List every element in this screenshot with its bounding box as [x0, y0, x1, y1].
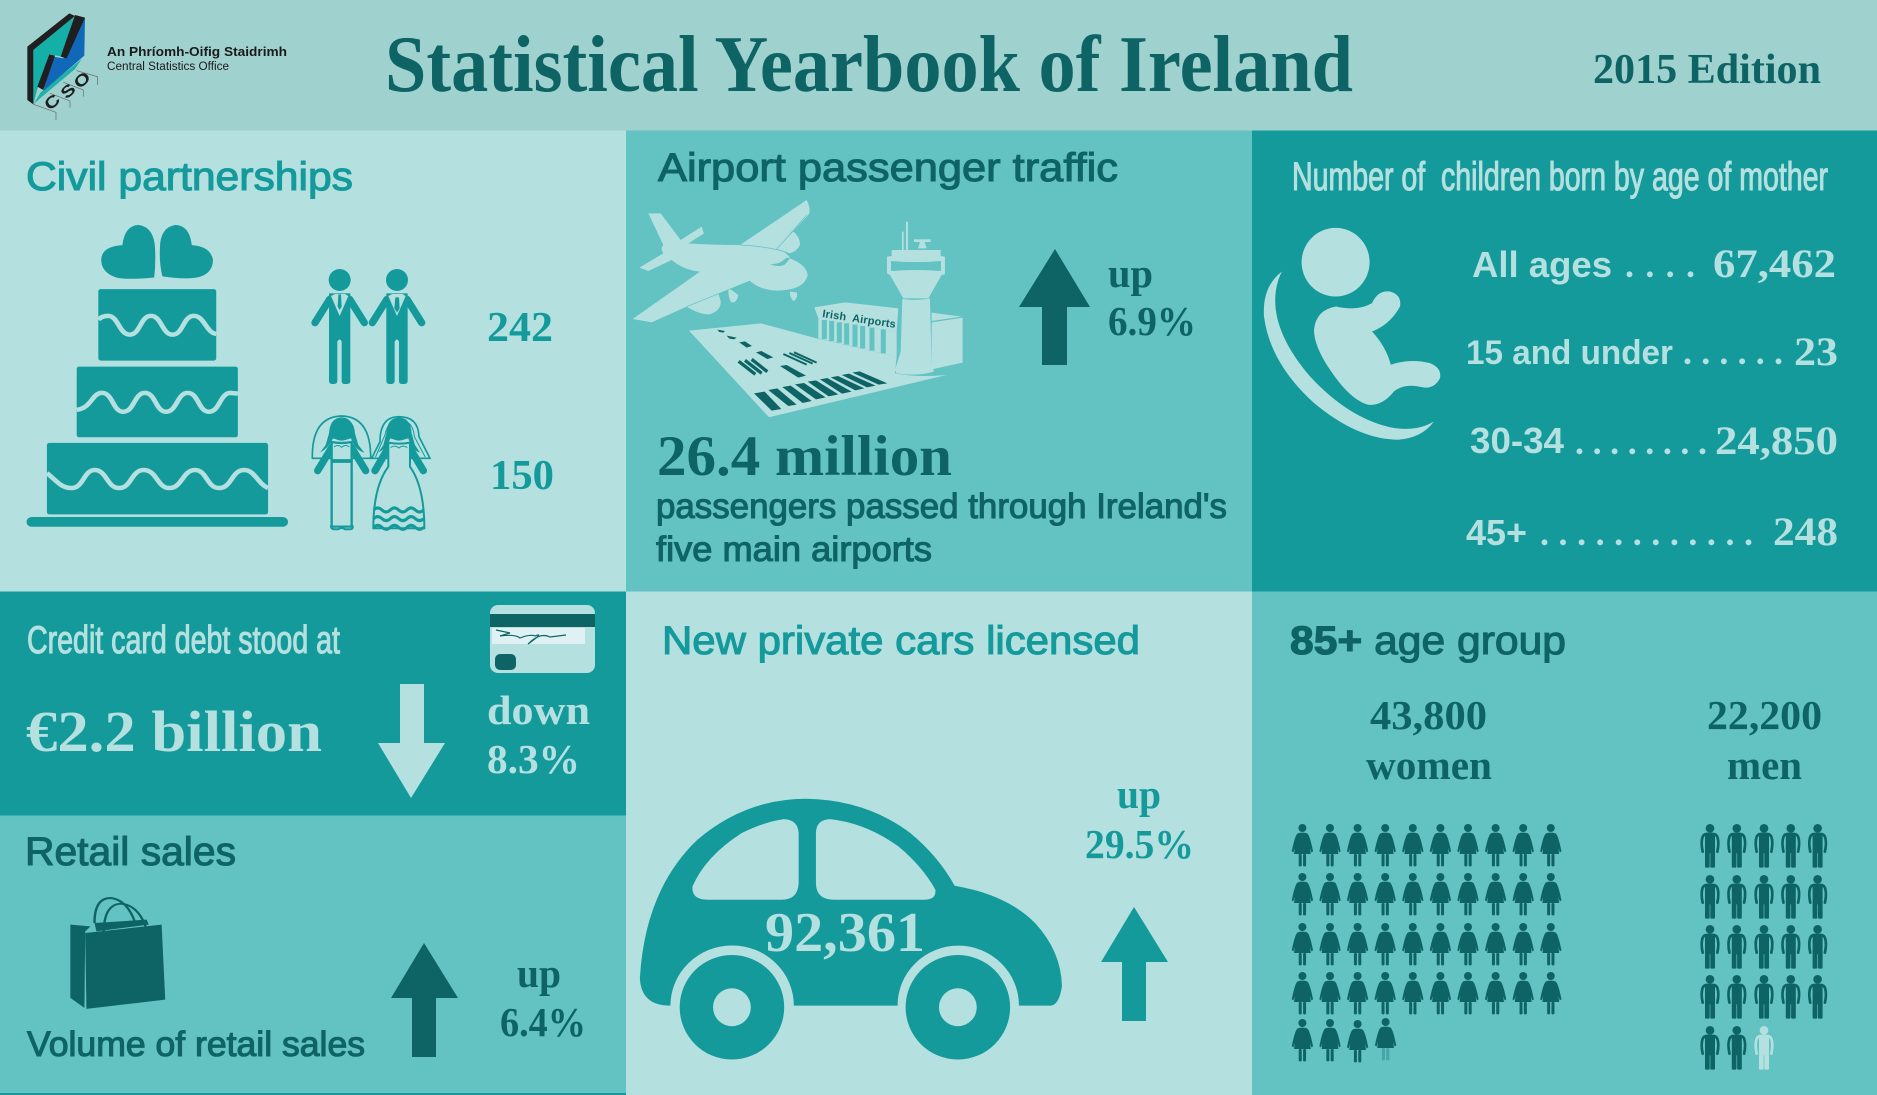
icon: car	[640, 799, 1062, 1060]
row: 15 and under: 15 and under	[1466, 334, 1673, 372]
women count: women	[1366, 742, 1492, 788]
change: up 6.9%: up	[1108, 250, 1153, 296]
edition: 2015 Edition	[1593, 47, 1821, 93]
row: 45+: 248	[1773, 509, 1838, 554]
row: 15 and under: . . . . . .	[1683, 332, 1783, 372]
row: 15 and under	[1466, 329, 1838, 374]
logo letters: C	[40, 90, 64, 114]
heading: Credit card debt stood at	[27, 619, 340, 662]
icon: baby	[1264, 228, 1440, 440]
arrow: down	[378, 684, 445, 798]
description	[656, 487, 1227, 569]
panel: airport passenger traffic	[626, 130, 1252, 592]
label: Volume of retail sales	[27, 1025, 365, 1064]
women count	[1366, 692, 1492, 788]
panel: new private cars	[626, 592, 1252, 1095]
description: five main airports	[656, 530, 932, 569]
women count: 43,800	[1370, 692, 1487, 738]
row: 45+	[1466, 509, 1838, 554]
row: all ages: All ages	[1472, 244, 1612, 285]
panel: children born by age of mother	[1252, 130, 1877, 592]
men count: 22,200	[1707, 692, 1822, 738]
stat: 2.2 billion: €2.2 billion	[26, 699, 322, 764]
row: 30-34: 30-34	[1470, 420, 1564, 461]
arrow: up	[1019, 249, 1090, 365]
heading: Retail sales	[25, 830, 236, 874]
panel: 85+ age group	[1252, 592, 1877, 1095]
logo text: English name: Central Statistics Office	[107, 61, 229, 73]
arrow: up	[391, 943, 458, 1057]
logo letters: S	[57, 80, 79, 102]
row: all ages: . . . .	[1625, 245, 1695, 285]
stat: 26.4 million: 26.4 million	[657, 425, 952, 488]
row: 45+: 45+	[1466, 512, 1527, 553]
change: up 29.5%: 29.5%	[1085, 821, 1194, 867]
title: Statistical Yearbook of Ireland	[385, 21, 1353, 109]
logo letters	[40, 68, 94, 114]
change: down 8.3%: 8.3%	[487, 736, 580, 782]
value: male partnerships: 242	[487, 305, 553, 351]
pictogram: men	[1702, 824, 1826, 1070]
change: up 29.5%: up	[1117, 771, 1161, 817]
change: down 8.3%	[487, 687, 590, 782]
heading: New private cars licensed	[662, 619, 1140, 663]
terminal sign: Irish Airports	[822, 308, 897, 331]
men count	[1707, 692, 1822, 788]
pictogram: women	[1292, 824, 1561, 1062]
panel: civil partnerships	[0, 130, 626, 592]
heading: Airport passenger traffic	[658, 146, 1118, 190]
row: 45+: . . . . . . . . . . . .	[1540, 513, 1753, 553]
change: up 29.5%	[1085, 771, 1194, 867]
icon: credit card	[490, 605, 595, 673]
heading: 85+ age group	[1290, 619, 1566, 663]
change: up 6.9%: 6.9%	[1108, 298, 1196, 344]
change: down 8.3%: down	[487, 687, 590, 733]
row: 15 and under: 23	[1794, 329, 1838, 374]
row: 30-34: 24,850	[1715, 418, 1838, 463]
value: cars licensed: 92,361	[765, 902, 925, 964]
arrow: up	[1101, 907, 1168, 1021]
change: up 6.4%	[500, 950, 586, 1045]
row: all ages: 67,462	[1713, 241, 1836, 286]
panel: credit card debt	[0, 592, 626, 816]
change: up 6.4%: 6.4%	[500, 999, 586, 1045]
row: 30-34: . . . . . . . .	[1575, 422, 1707, 462]
icon: wedding cake	[27, 225, 288, 527]
row: 30-34	[1470, 418, 1838, 463]
icon: two brides	[312, 416, 430, 529]
logo letters: O	[70, 68, 94, 92]
panel: retail sales	[0, 816, 626, 1095]
change: up 6.9%	[1108, 250, 1196, 344]
panel: header	[0, 0, 1877, 130]
change: up 6.4%: up	[517, 950, 561, 996]
icon: plane, tower and terminal	[633, 200, 963, 417]
men count: men	[1727, 742, 1802, 788]
heading: Civil partnerships	[26, 155, 353, 199]
value: female partnerships: 150	[490, 453, 554, 499]
description: passengers passed through Ireland's	[656, 487, 1227, 526]
icon: CSO logo	[27, 13, 97, 120]
icon: shopping bag	[70, 898, 165, 1009]
row: all ages	[1472, 241, 1836, 286]
icon: two grooms	[315, 269, 422, 384]
logo text: Irish name: An Phríomh-Oifig Staidrimh	[107, 44, 287, 59]
